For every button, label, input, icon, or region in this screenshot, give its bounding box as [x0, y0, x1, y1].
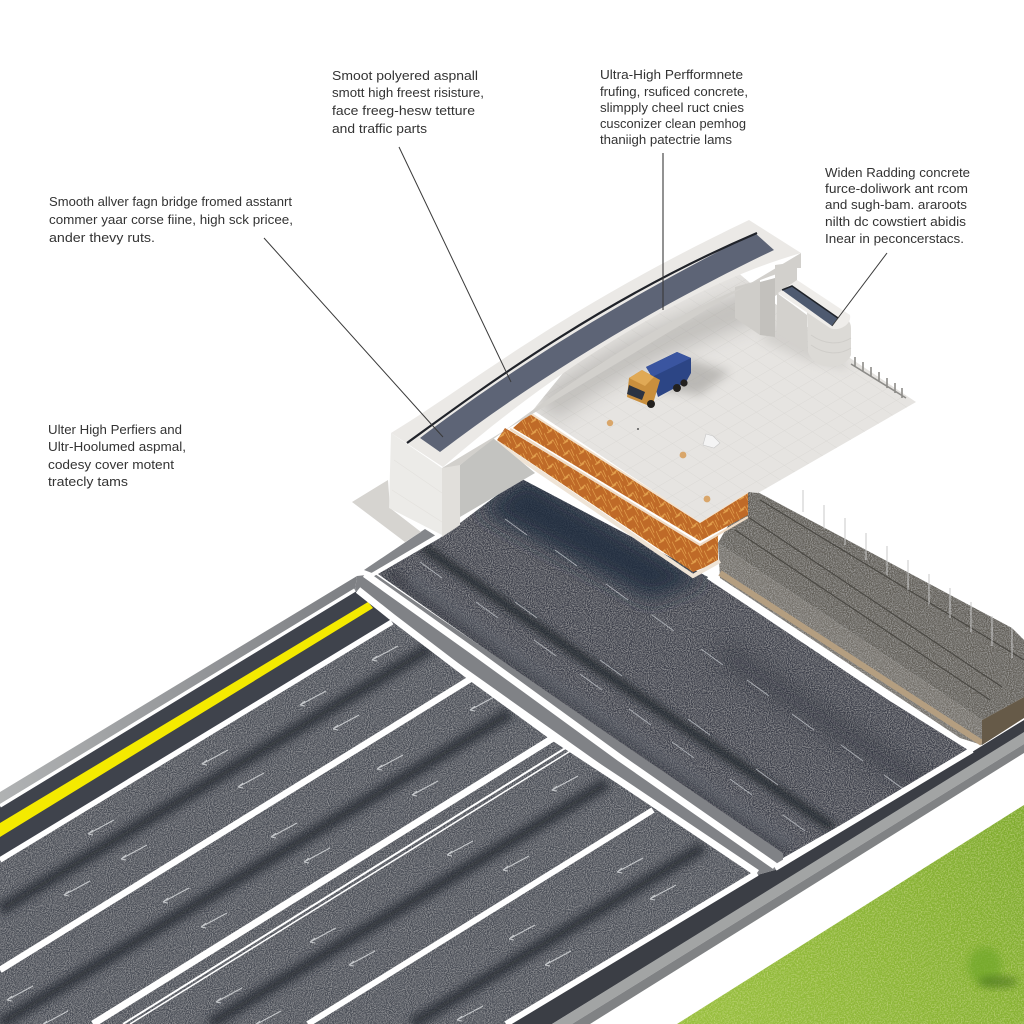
leader line: top right callout: [662, 153, 664, 310]
orange layered foundation: [496, 413, 748, 576]
callout text: top centre: [332, 69, 484, 136]
truck: [627, 352, 691, 408]
yellow centre line: [0, 602, 373, 837]
leader line: top centre callout: [399, 147, 511, 382]
callout text: far right: and sugh-bam. araroots: [825, 198, 967, 212]
kerb and gutter strip: [506, 720, 1024, 1024]
right carriageway lane dashes: [420, 519, 906, 831]
left carriageway lane arrows: [7, 646, 676, 1024]
callout text: far right: [825, 166, 970, 246]
callout text: mid left: Ulter High Perfiers and: [48, 423, 182, 437]
wall fence posts: [803, 490, 1012, 658]
outer edge band: [0, 576, 357, 804]
retaining wall: [708, 488, 1024, 750]
callout text: far right: furce-doliwork ant rcom: [825, 182, 968, 196]
plaza deck with paving grid: [533, 270, 916, 522]
callout text: top right: frufing, rsuficed concrete,: [600, 85, 748, 99]
callout text: mid left: [48, 423, 186, 489]
callout text: top right: cusconizer clean pemhog: [600, 117, 746, 131]
right carriageway asphalt: [378, 475, 972, 858]
callout text: upper left: Smooth allver fagn bridge fromed asstanrt: [49, 195, 293, 209]
deck debris: [607, 420, 720, 502]
callout text: far right: nilth dc cowstiert abidis: [825, 215, 966, 229]
callout text: top centre: smott high freest risisture,: [332, 86, 484, 100]
callout text: mid left: codesy cover motent: [48, 458, 175, 472]
callout text: top right: [600, 68, 748, 147]
callout text: far right: Widen Radding concrete: [825, 166, 970, 180]
callout text: top right: slimpply cheel ruct cnies: [600, 101, 744, 115]
left concrete pad: [352, 480, 421, 542]
callout text: top centre: and traffic parts: [332, 122, 427, 136]
callout text: upper left: commer yaar corse fiine, high sck pricee,: [49, 213, 293, 227]
deck edge posts: [851, 357, 906, 398]
callout text: top right: thaniigh patectrie lams: [600, 133, 732, 147]
callout text: mid left: tratecly tams: [48, 475, 128, 489]
white lane lines: [0, 590, 757, 1024]
callout text: upper left: ander thevy ruts.: [49, 231, 155, 245]
bridge left pier: [389, 433, 535, 537]
callout text: far right: Inear in peconcerstacs.: [825, 232, 964, 246]
callout text: top centre: face freeg-hesw tetture: [332, 104, 475, 118]
leader line: far right callout: [832, 253, 887, 326]
callout text: upper left: [49, 195, 293, 245]
bridge deck arch: [391, 220, 801, 468]
central median band: [355, 529, 1024, 875]
callout text: top centre: Smoot polyered aspnall: [332, 69, 478, 83]
callout text: top right: Ultra-High Perfformnete: [600, 68, 743, 82]
bridge asphalt deck strip: [407, 233, 774, 452]
callout text: mid left: Ultr-Hoolumed aspmal,: [48, 440, 186, 454]
left carriageway asphalt lanes: [0, 590, 757, 1024]
right pier and curved end wall: [735, 262, 851, 367]
grass verge: [677, 805, 1024, 1024]
leader line: upper left callout: [264, 238, 443, 437]
